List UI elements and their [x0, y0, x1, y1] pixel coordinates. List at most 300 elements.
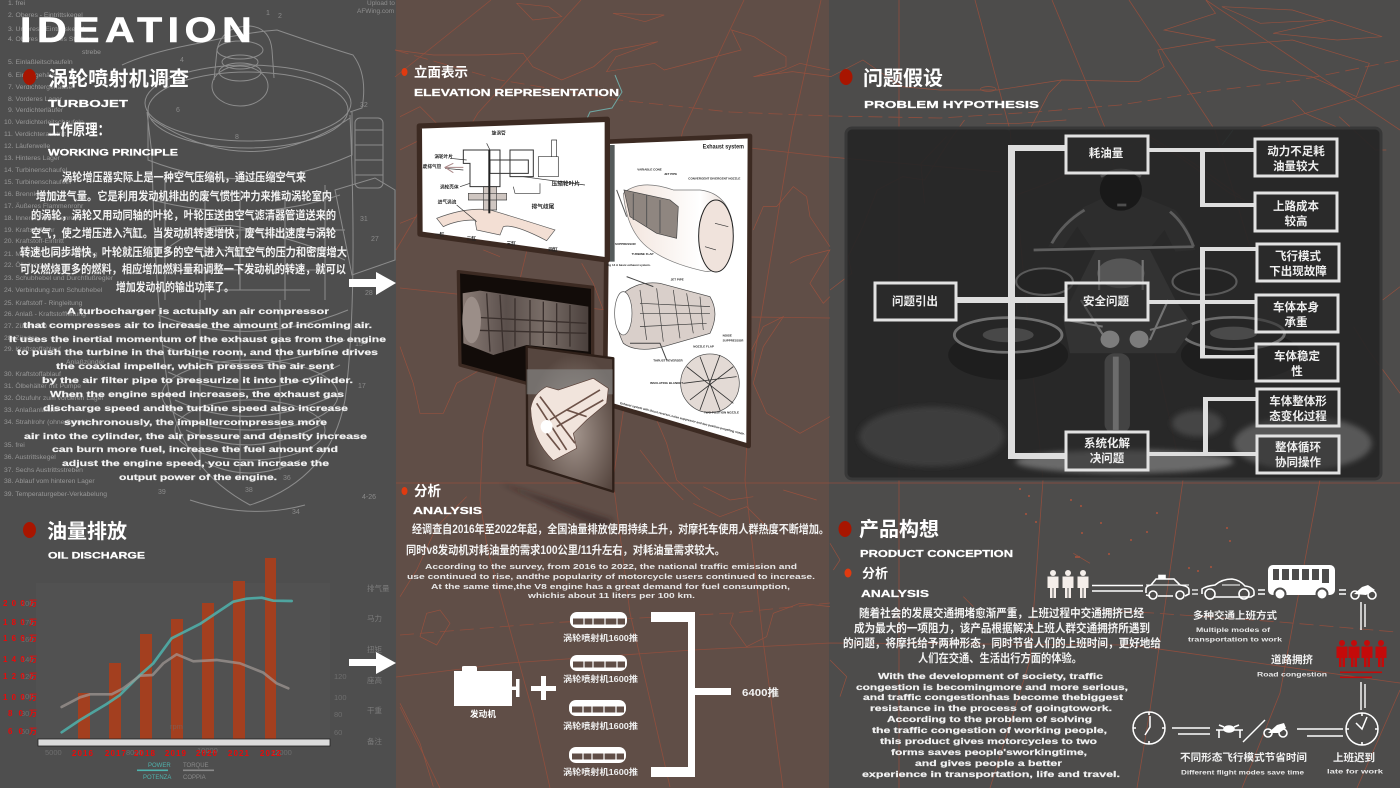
side labels: 干重 — [367, 706, 382, 715]
section: problem hypothesis heading — [840, 67, 1039, 111]
icon: red congested crowd — [1336, 640, 1386, 678]
text block: Chinese working principle — [20, 170, 347, 294]
card: exhaust system drawing: Exhaust system — [703, 144, 744, 151]
section: product conception heading — [838, 518, 1013, 560]
panel: engine elevation images — [419, 119, 750, 530]
label: late for work: 上班迟到 — [1333, 751, 1375, 764]
background engine blueprint sketch with parts list: 8 — [235, 134, 239, 141]
text block: product Chinese — [843, 606, 1161, 665]
background engine blueprint sketch with parts list: 4 — [180, 57, 184, 64]
label: road congestion: Road congestion — [1257, 672, 1327, 678]
text block: Chinese working principle: 涡轮增压器实际上是一种空气压缩机，通过压缩空气来 — [62, 170, 306, 184]
connector: clock to transport modes — [1297, 729, 1343, 736]
node: lack of power: 动力不足耗 — [1267, 144, 1325, 158]
node: road cost: 上路成本 — [1273, 199, 1319, 213]
axis numbers: rpm — [170, 722, 183, 731]
text block: English working principle: adjust the engine speed, you can increase the — [62, 458, 329, 468]
connectors — [957, 145, 1256, 459]
text block: product English: resistance in the process of goingtowork. — [870, 703, 1112, 713]
axis numbers: 100 — [334, 693, 347, 702]
red axis labels: 160万 — [3, 634, 37, 643]
axis numbers: 160 — [21, 635, 34, 644]
card: exhaust system drawing: Fig 14 A basic exhaust system. — [607, 263, 651, 267]
node: systematic solution: 决问题 — [1090, 451, 1125, 465]
text block: product English: and traffic congestionhas become thebiggest — [863, 692, 1123, 702]
watermark: AFWing.com — [357, 8, 394, 15]
parts list: 20. Kraftstoff-Eintritt — [4, 238, 64, 245]
card: cylinder schematic: 进气涡流 — [438, 198, 457, 205]
node: flight fault — [1257, 244, 1339, 281]
red axis labels: 80万 — [8, 709, 37, 718]
card: exhaust system drawing: NOISE — [723, 334, 732, 338]
section: elevation representation heading: ELEVATION REPRESENTATION — [414, 88, 619, 99]
red axis labels: 140万 — [3, 655, 37, 664]
parts list: 39. Temperaturgeber-Verkabelung — [4, 491, 107, 498]
section: elevation representation heading — [402, 64, 619, 99]
node: body stability — [1256, 344, 1338, 381]
axis numbers: 10000 — [197, 746, 218, 755]
background engine blueprint sketch with parts list: 27 — [371, 236, 379, 243]
text block: product Chinese: 的问题，将摩托给予两种形态，同时节省人们的上班时间，更好地给 — [843, 636, 1161, 650]
bracket: total thrust — [651, 612, 731, 777]
icon: engine block: 发动机 — [470, 709, 496, 719]
text block: Chinese working principle: 的涡轮，涡轮又用动同轴的叶轮，叶轮压送由空气滤清器管道送来的 — [31, 208, 336, 222]
label: total thrust: 6400推 — [742, 686, 780, 699]
parts list: 5. Einlaßleitschaufeln — [8, 59, 73, 66]
connector: taxi to car — [1192, 590, 1198, 594]
card: cylinder schematic: 二缸 — [467, 235, 476, 241]
rear and side rotors — [948, 330, 1068, 380]
parts list: 10. Verdichterleitschaufeln — [4, 119, 84, 126]
year labels: 2017 — [105, 749, 127, 758]
card: exhaust system drawing: TURBINE FLAP — [632, 252, 654, 256]
card: exhaust system drawing: JET PIPE — [671, 278, 684, 282]
section: turbojet survey heading: WORKING PRINCIPLE — [48, 148, 178, 158]
text block: product Chinese: 成为最大的一项阻力，该产品根据解决上班人群交通拥挤所遇到 — [854, 621, 1150, 635]
label: multiple transport modes: 多种交通上班方式 — [1193, 609, 1277, 622]
watermark: Upload to — [367, 0, 395, 7]
axis numbers: 120 — [21, 672, 34, 681]
text block: Chinese working principle: 增加进气量。它是利用发动机排出的废气惯性冲力来推动涡轮室内 — [36, 189, 332, 203]
text block: product English: this product gives motorcycles to two — [880, 736, 1097, 746]
icon: four jet engines with labels: 涡轮喷射机1600推 — [563, 633, 639, 643]
rider — [1048, 197, 1195, 252]
icon: bus — [1268, 565, 1335, 600]
icon: motorcycle — [1351, 585, 1376, 599]
section: product analysis heading: 分析 — [862, 566, 888, 581]
icon: clock late — [1346, 713, 1378, 745]
red axis labels: 180万 — [3, 618, 37, 627]
watermark — [357, 0, 395, 15]
section: turbojet survey heading: TURBOJET — [48, 99, 128, 110]
side labels: 排气量 — [367, 583, 390, 593]
text block: analysis Chinese — [406, 522, 829, 557]
legend: COPPIA — [183, 775, 206, 781]
parts list: Anlaßzünder — [66, 359, 105, 366]
card: cylinder schematic: 压缩轮叶片 — [552, 179, 580, 187]
parts list: 4. Oberes Vorderes Strebe — [8, 36, 89, 43]
parts list: 21. Mitteldruck-Kraftstoffleitung — [4, 251, 98, 258]
text block: product English: and gives people a better — [915, 758, 1063, 768]
text block: English working principle: It uses the inertial momentum of the exhaust gas from the engine — [9, 334, 386, 344]
parts list: 19. Kraftstoffrohr — [4, 227, 55, 234]
year labels — [72, 749, 282, 758]
parts list: 37. Sechs Austrittsstreben — [4, 467, 83, 474]
flowchart: problem hypothesis tree — [875, 136, 1339, 473]
icon: four jet engines with labels: 涡轮喷射机1600推 — [563, 767, 639, 777]
label: late for work: late for work — [1327, 770, 1384, 776]
card: cylinder schematic: 涡轮壳体 — [440, 184, 459, 191]
node: body load: 承重 — [1284, 315, 1308, 329]
arrow: to elevation panel — [349, 272, 396, 295]
x axis bar — [38, 739, 330, 746]
axis numbers: 80 — [334, 710, 342, 719]
text block: analysis English: whichis about 11 liters per 100 km. — [527, 591, 695, 600]
node: lack of power — [1255, 139, 1337, 176]
node: overall coordination — [1257, 436, 1339, 473]
text block: English working principle: discharge speed andthe turbine speed also increase — [43, 403, 348, 413]
section: product conception heading: 产品构想 — [859, 518, 939, 541]
icon: plus sign — [531, 676, 556, 700]
text block: analysis English — [407, 562, 815, 600]
label: flight modes save time: Different flight modes save time — [1181, 770, 1305, 776]
axis numbers: 170 — [21, 618, 34, 627]
parts list: 13. Hinteres Lager — [4, 155, 61, 162]
text block: English working principle: to push the turbine in the turbine room, and the turbine drives — [17, 347, 378, 357]
node: road cost — [1255, 193, 1337, 231]
power and torque curves — [62, 598, 292, 732]
year labels: 2018 — [134, 749, 156, 758]
connector: congestion to late clock — [1361, 682, 1365, 710]
connector: motorcycle to congestion — [1361, 602, 1365, 630]
side labels — [367, 583, 390, 746]
text block: Chinese working principle: 增加发动机的输出功率了。 — [116, 280, 234, 294]
text block: English working principle: the coaxial impeller, which presses the air sent — [56, 361, 334, 371]
parts list: 34. Strahlrohr (ohne Schub) — [4, 419, 88, 426]
parts list — [4, 0, 114, 498]
jet engine 1 — [570, 612, 627, 628]
axis numbers: 120 — [334, 672, 347, 681]
parts list: 8. Vorderes Lager — [8, 96, 63, 103]
label: multiple transport modes: transportation to work — [1188, 638, 1283, 644]
engine outline — [122, 26, 395, 511]
node: overall coordination: 整体循环 — [1275, 440, 1321, 454]
parts list: 36. Austrittskegel — [4, 454, 56, 461]
node: problem introduction: 问题引出 — [892, 294, 938, 308]
node: flight fault: 飞行模式 — [1275, 249, 1321, 263]
side labels: 扭矩 — [367, 644, 382, 654]
side labels: 备注 — [367, 736, 382, 746]
red axis labels — [3, 599, 37, 736]
icon: four jet engines with labels: 涡轮喷射机1600推 — [563, 674, 639, 684]
background engine blueprint sketch with parts list: 31 — [360, 216, 368, 223]
background engine blueprint sketch with parts list: 15 — [355, 341, 363, 348]
text block: English working principle: that compresses air to increase the amount of incoming air. — [23, 320, 372, 330]
text block: product English — [856, 671, 1128, 779]
red axis labels: 120万 — [3, 672, 37, 681]
section: oil discharge heading: OIL DISCHARGE — [48, 550, 145, 560]
axis numbers: 60 — [334, 728, 342, 737]
parts list: 1. frei — [8, 0, 25, 7]
card: cylinder schematic: 三缸 — [507, 240, 516, 246]
section: turbojet survey heading: 涡轮喷射机调查 — [48, 68, 189, 90]
parts list: 9. Verdichterläufer — [8, 107, 64, 114]
section: turbojet survey heading — [23, 68, 189, 158]
background engine blueprint sketch with parts list: 1 — [266, 10, 270, 17]
text block: analysis Chinese: 经调查自2016年至2022年起，全国油量排放使用持续上升，对摩托车使用人群热度不断增加。 — [412, 522, 829, 536]
card: exhaust system drawing: VARIABLE CONE — [637, 168, 662, 172]
icon: drone mode — [1216, 725, 1243, 738]
card: cylinder schematic: 四缸 — [548, 246, 558, 253]
node: systematic solution: 系统化解 — [1084, 436, 1130, 450]
node: fuel consumption — [1066, 136, 1148, 173]
node: overall coordination: 协同操作 — [1275, 455, 1321, 469]
parts list: 26. Anlaß - Kraftstoffleitung — [4, 311, 86, 318]
axis numbers: 80 — [21, 709, 29, 718]
background engine blueprint sketch with parts list — [4, 0, 395, 516]
label: multiple transport modes — [1188, 609, 1283, 644]
node: body load — [1256, 295, 1338, 332]
card: cylinder schematic — [419, 119, 607, 260]
section: elevation representation heading: 立面表示 — [414, 64, 468, 80]
node: road cost: 较高 — [1284, 214, 1308, 228]
card: exhaust system drawing — [605, 136, 750, 446]
parts list: 27. Zündkerze — [4, 323, 48, 330]
parts list: 23. Schubhebel und Durchflußregler — [4, 275, 114, 282]
label: flight modes save time: 不同形态飞行模式节省时间 — [1180, 751, 1307, 764]
text block: product English: congestion is becomingmore and more serious, — [856, 682, 1128, 692]
node: lack of power: 油量较大 — [1273, 159, 1319, 173]
text block: Chinese working principle: 转速也同步增快，叶轮就压缩更多的空气进入汽缸空气的压力和密度增大 — [20, 245, 347, 259]
text block: analysis English: At the same time,the V8 engine has a great demand for fuel consumption, — [431, 582, 790, 591]
arrow: to analysis panel — [349, 652, 396, 674]
text block: analysis Chinese: 同时v8发动机对耗油量的需求100公里/11升左右，对耗油量需求较大。 — [406, 543, 725, 557]
parts list: 31. Ölbehälter mit Pumpe — [4, 382, 81, 390]
label: road congestion — [1257, 653, 1327, 678]
section: analysis heading — [402, 483, 482, 517]
bars — [78, 558, 276, 739]
card: exhaust system drawing: NOZZLE FLAP — [693, 344, 714, 348]
parts list: 6. Einlaßgehäuse — [8, 72, 61, 79]
node: body stability: 车体稳定 — [1274, 349, 1320, 363]
axis numbers: 50 — [21, 727, 29, 736]
parts list: 18. Inneres Flammenrohr — [4, 215, 81, 222]
icon: motorcycle mode — [1264, 723, 1287, 737]
node: safety issues: 安全问题 — [1083, 294, 1129, 308]
text block: English working principle: When the engine speed increases, the exhaust gas — [50, 389, 344, 399]
card: exhaust system drawing: TWO-POSITION NOZZLE — [704, 410, 739, 414]
node: body stability: 性 — [1291, 364, 1303, 378]
axis numbers: 200 — [21, 599, 34, 608]
text block: product English: With the development of society, traffic — [878, 671, 1103, 681]
parts list: 3. Unteres - Eintrittskegel — [8, 26, 85, 33]
section: problem hypothesis heading: 问题假设 — [863, 67, 943, 90]
parts list: 29. Kraftstoffablauf — [4, 346, 61, 353]
parts list: 22. Ölleitung — [4, 261, 42, 269]
label: late for work — [1327, 751, 1384, 776]
card: dark engine render — [458, 272, 593, 383]
parts list: 24. Verbindung zum Schubhebel — [4, 287, 103, 294]
icon: car — [1202, 579, 1254, 599]
background engine blueprint sketch with parts list: 36 — [283, 475, 291, 482]
icon: four jet engines with labels — [563, 612, 639, 777]
card: exhaust system drawing: CONVERGENT DIVERGENT NOZZLE — [688, 176, 740, 180]
card shadow — [500, 483, 613, 530]
icon: three commuters — [1048, 570, 1088, 598]
node: fuel consumption: 耗油量 — [1089, 146, 1124, 160]
node: systematic solution — [1066, 432, 1148, 470]
jet engine 4 — [569, 747, 626, 763]
card: exhaust system drawing: THRUST REVERSER — [653, 359, 684, 363]
bar and line chart: oil discharge — [3, 558, 390, 781]
section: product conception heading: PRODUCT CONCEPTION — [860, 549, 1013, 560]
card: cylinder schematic: 旋涡管 — [492, 130, 506, 137]
axis numbers: 140 — [21, 655, 34, 664]
parts list: 14. Turbinenschaufel — [4, 167, 68, 174]
parts list: 32. Ölzufuhr zum vorderen Lager — [4, 394, 104, 402]
side labels: 马力 — [367, 613, 382, 623]
connector: car to bus — [1258, 590, 1265, 594]
parts list: 38. Ablauf vom hinteren Lager — [4, 478, 95, 485]
background engine blueprint sketch with parts list: 6 — [176, 107, 180, 114]
label: multiple transport modes: Multiple modes of — [1196, 628, 1271, 634]
section: analysis heading: ANALYSIS — [413, 506, 482, 517]
front wheel — [1105, 353, 1130, 433]
card: exhaust system drawing: SUPPRESSOR — [723, 338, 744, 342]
connector: bus to motorcycle — [1339, 590, 1346, 594]
background engine blueprint sketch with parts list: 38 — [245, 487, 253, 494]
background engine blueprint sketch with parts list: 2 — [278, 13, 282, 20]
card: cylinder schematic: 涡轮叶片 — [434, 153, 453, 160]
text block: English working principle: by the air filter pipe to pressurize it into the cylinder. — [42, 375, 353, 385]
parts list: 25. Kraftstoff - Ringleitung — [4, 300, 83, 307]
parts list: 33. Anlaßanlasser — [4, 407, 59, 414]
card: exhaust system drawing: Exhaust system with thrust reverser, noise suppressor and two position propelling nozzle. — [620, 401, 745, 436]
parts list: 12. Läuferwelle — [4, 143, 50, 150]
background engine blueprint sketch with parts list: 32 — [360, 102, 368, 109]
text block: English working principle: can burn more fuel, increase the fuel amount and — [52, 444, 338, 454]
axis numbers: 8000 — [126, 748, 143, 757]
year labels: 2019 — [165, 749, 187, 758]
text block: English working principle: synchronously, the impellercompresses more — [64, 417, 327, 427]
text block: product English: the traffic congestion of working people, — [872, 725, 1107, 735]
section: oil discharge heading: 油量排放 — [47, 520, 127, 543]
year labels: 2016 — [72, 749, 94, 758]
year labels: 2022 — [260, 749, 282, 758]
panel: motorcycle photo — [846, 128, 1381, 479]
legend: TORQUE — [183, 763, 209, 769]
node: problem introduction — [875, 283, 956, 320]
axis numbers: 5000 — [45, 748, 62, 757]
year labels: 2020 — [196, 749, 218, 758]
section: turbojet survey heading: 工作原理： — [48, 121, 110, 139]
background engine blueprint sketch with parts list: 17 — [358, 383, 366, 390]
background engine blueprint sketch with parts list: 4-26 — [362, 494, 376, 501]
parts list: 30. Kraftstoffablauf — [4, 371, 61, 378]
card: cylinder schematic: 一缸 — [435, 231, 445, 237]
legend — [137, 763, 214, 781]
axis numbers: 100 — [21, 692, 34, 701]
background engine blueprint sketch with parts list: 39 — [158, 489, 166, 496]
legend: POTENZA — [143, 775, 171, 781]
card: exhaust system drawing: INSULATING BLANKET — [650, 381, 683, 385]
text block: product English: experience in transportation, life and travel. — [862, 769, 1120, 779]
node: body load: 车体本身 — [1273, 300, 1319, 314]
text block: product English: forms saves people'sworkingtime, — [891, 747, 1087, 757]
section: product analysis heading — [844, 566, 929, 600]
title: IDEATION — [20, 12, 252, 50]
slash between flight and ride modes — [1243, 720, 1265, 742]
label: road congestion: 道路拥挤 — [1271, 653, 1313, 666]
parts list: 35. frei — [4, 442, 25, 449]
section: product analysis heading: ANALYSIS — [861, 589, 929, 600]
year labels: 2021 — [228, 749, 250, 758]
floor light — [859, 407, 1372, 473]
node: flight fault: 下出现故障 — [1269, 264, 1327, 278]
section: analysis heading: 分析 — [414, 483, 441, 499]
label: flight modes save time — [1180, 751, 1307, 776]
parts list: strebe — [82, 49, 101, 56]
side labels: 座高 — [367, 675, 382, 685]
connector: people to taxi — [1092, 586, 1143, 591]
card: cylinder schematic: 排气歧尾 — [532, 203, 555, 211]
parts list: 11. Verdichteraustritt — [4, 131, 66, 138]
red axis labels: 60万 — [8, 727, 37, 736]
section: problem hypothesis heading: PROBLEM HYPOTHESIS — [864, 100, 1039, 111]
card: cylinder schematic: 废排气管 — [423, 163, 442, 170]
text block: Chinese working principle: 空气，使之增压进入汽缸。当发动机转速增快，废气排出速度与涡轮 — [31, 226, 336, 240]
parts list: 15. Turbinenschaufeln — [4, 179, 71, 186]
text block: English working principle: A turbocharger is actually an air compressor — [67, 306, 330, 316]
red axis labels: 100万 — [3, 693, 37, 702]
section: oil discharge heading — [23, 520, 145, 560]
background engine blueprint sketch with parts list: 28 — [365, 290, 373, 297]
text block: analysis English: According to the survey, from 2016 to 2022, the national traffic emission and — [425, 562, 798, 571]
icon: four jet engines with labels: 涡轮喷射机1600推 — [563, 721, 639, 731]
card: exhaust system drawing: SUPPRESSOR — [615, 242, 637, 246]
parts list: 16. Brennkammer — [4, 191, 59, 198]
card: turbine cutaway — [527, 347, 613, 492]
text block: English working principle: air into the cylinder, the air pressure and density increase — [24, 431, 367, 441]
parts list: 2. Oberes - Eintrittskegel — [8, 12, 83, 19]
legend: POWER — [148, 763, 171, 769]
node: body transformation: 态变化过程 — [1269, 409, 1327, 423]
icon: engine block — [454, 666, 520, 719]
text block: product Chinese: 随着社会的发展交通拥堵愈渐严重，上班过程中交通拥挤已经 — [859, 606, 1144, 620]
text block: Chinese working principle: 可以燃烧更多的燃料，相应增加燃料量和调整一下发动机的转速，就可以 — [20, 262, 346, 276]
bike body — [1063, 250, 1194, 353]
text block: analysis English: use continued to rise, andthe popularity of motorcycle users continued to increase. — [407, 572, 815, 581]
parts list: 7. Verdichtergehäuse — [8, 84, 72, 91]
text block: product Chinese: 人们在交通、生活出行方面的体验。 — [918, 651, 1082, 665]
background engine blueprint sketch with parts list: 34 — [292, 509, 300, 516]
icon: clock on time — [1133, 712, 1165, 744]
node: body transformation — [1257, 389, 1339, 426]
text block: English working principle: output power of the engine. — [119, 472, 277, 482]
parts list: 17. Äußeres Flammenrohr — [4, 202, 84, 210]
node: safety issues — [1066, 283, 1148, 320]
text block: English working principle — [9, 306, 386, 482]
connector: start clock to drone — [1172, 728, 1210, 734]
world map line background — [395, 0, 1400, 788]
text block: product English: According to the problem of solving — [887, 714, 1092, 724]
axis numbers: 12000 — [271, 748, 292, 757]
node: body transformation: 车体整体形 — [1269, 394, 1327, 408]
icon: taxi — [1146, 576, 1189, 599]
red axis labels: 200万 — [3, 599, 37, 608]
jet engine 2 — [570, 655, 627, 671]
jet engine 3 — [569, 700, 626, 716]
